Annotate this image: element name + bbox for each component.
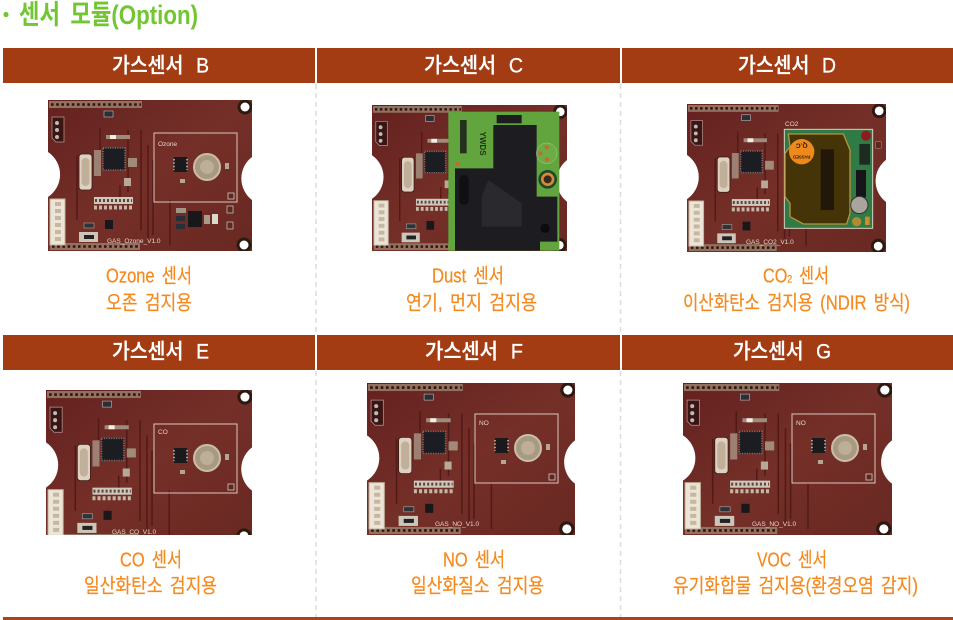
header bar: bottom row [3, 335, 953, 370]
caption: CO: CO 센서 [120, 548, 182, 572]
board photo: CO sensor: GAS_CO_V1.0 [112, 529, 156, 536]
header bar: top row: 가스센서 C [424, 54, 523, 78]
board photo: ozone sensor: GAS_Ozone_V1.0 [107, 238, 161, 245]
header bar: bottom row: 가스센서 G [733, 340, 831, 364]
board photo: CO2 sensor: Q.C [796, 142, 808, 149]
panel: gas sensor F [367, 382, 576, 598]
panel: gas sensor G [673, 382, 918, 598]
board photo: ozone sensor [48, 100, 252, 252]
caption: VOC: VOC 센서 [757, 548, 827, 572]
caption: NO: 일산화질소 검지용 [411, 574, 544, 598]
header bar: top row: 가스센서 D [738, 54, 836, 78]
caption: ozone: Ozone 센서 [106, 264, 192, 288]
header bar: top row [3, 48, 953, 83]
board photo: CO2 sensor: PASSED [793, 154, 810, 159]
panel: gas sensor D [683, 104, 910, 314]
board photo: VOC sensor [683, 382, 893, 537]
board photo: NO sensor [367, 382, 576, 537]
caption: dust: Dust 센서 [432, 264, 504, 288]
title: 센서 모듈(Option) [19, 0, 198, 30]
caption: VOC [673, 548, 918, 598]
board photo: CO sensor [40, 389, 260, 544]
panel: gas sensor B [48, 100, 252, 314]
board photo: CO2 sensor: GAS_CO2_V1.0 [746, 239, 794, 246]
caption: CO: 일산화탄소 검지용 [84, 574, 217, 598]
board photo: NO sensor: GAS_NO_V1.0 [435, 521, 479, 528]
board photo: VOC sensor: NO [796, 420, 806, 427]
caption: NO [411, 548, 544, 598]
board photo: dust sensor [372, 105, 567, 252]
caption: dust [406, 264, 537, 314]
header bar: top row: 가스센서 B [112, 54, 209, 78]
caption: ozone [106, 264, 192, 314]
board photo: CO2 sensor: CO2 [785, 121, 799, 128]
caption: CO [84, 548, 217, 598]
caption: CO2 [683, 264, 910, 314]
board photo: CO sensor: CO [158, 429, 168, 436]
caption: CO2: 이산화탄소 검지용 (NDIR 방식) [683, 292, 910, 314]
board photo: CO2 sensor [687, 104, 886, 253]
caption: dust: 연기, 먼지 검지용 [406, 292, 537, 314]
header bar: bottom row: 가스센서 F [425, 340, 523, 364]
caption: NO: NO 센서 [443, 548, 505, 572]
caption: ozone: 오존 검지용 [106, 292, 192, 314]
caption: VOC: 유기화합물 검지용(환경오염 감지) [673, 574, 918, 598]
board photo: ozone sensor: Ozone [158, 141, 178, 148]
board photo: NO sensor: NO [479, 420, 489, 427]
header bar: bottom row: 가스센서 E [112, 340, 209, 364]
panel: gas sensor C [372, 105, 567, 314]
panel: gas sensor E [40, 389, 260, 598]
board photo: VOC sensor: GAS_NO_V1.0 [752, 521, 796, 528]
board photo: dust sensor: YWDS [478, 132, 487, 156]
caption: CO2: CO2 센서 [763, 264, 829, 288]
